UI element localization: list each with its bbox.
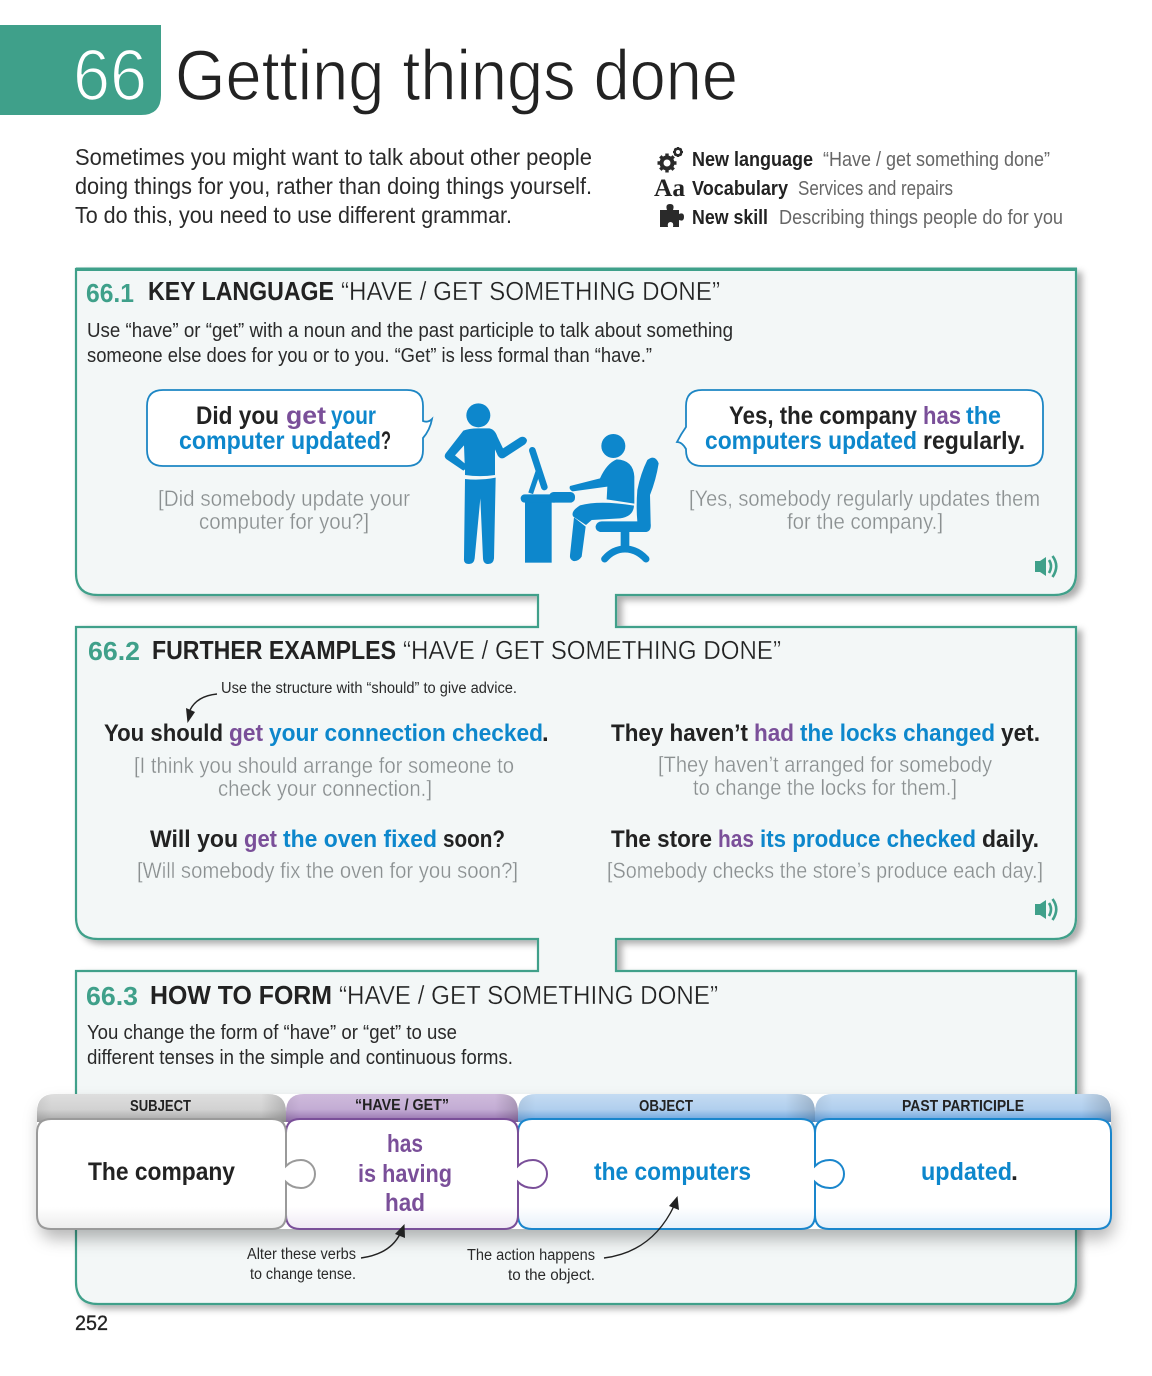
heading 66.3: [86, 980, 718, 1011]
example 1: [104, 720, 549, 801]
learning objectives: New skill: [692, 207, 768, 229]
puzzle piece: have / get: is having: [358, 1160, 452, 1188]
speech bubble: answer: the: [966, 402, 1001, 430]
paraphrase: answer: for the company.]: [787, 509, 943, 534]
explanation text: different tenses in the simple and continuous forms.: [87, 1047, 513, 1069]
example 3: get: [244, 826, 277, 853]
learning objectives: [654, 147, 1063, 229]
example 2: to change the locks for them.]: [693, 775, 957, 800]
speech bubble: question: ?: [381, 427, 391, 455]
heading 66.1: “HAVE / GET SOMETHING DONE”: [341, 276, 720, 306]
example 2: [They haven’t arranged for somebody: [658, 752, 992, 777]
heading 66.3: “HAVE / GET SOMETHING DONE”: [339, 980, 718, 1010]
explanation text: [87, 1022, 513, 1069]
example 2: had: [754, 720, 794, 747]
example 4: daily.: [982, 826, 1039, 853]
heading 66.3: 66.3: [86, 981, 138, 1011]
learning objectives: Vocabulary: [692, 178, 789, 200]
puzzle piece: have / get: had: [385, 1189, 425, 1217]
explanation text: [87, 320, 733, 367]
example 1: check your connection.]: [218, 776, 432, 801]
heading 66.2: 66.2: [88, 636, 140, 666]
puzzle piece: subject: SUBJECT: [130, 1098, 191, 1115]
speech bubble: answer: [677, 390, 1043, 466]
intro text: Sometimes you might want to talk about other people: [75, 144, 592, 170]
speech bubble: question: computer updated: [179, 427, 381, 455]
icon: audio speaker: [1035, 899, 1056, 920]
puzzle piece: object: the computers: [594, 1158, 751, 1186]
example 1: get: [229, 720, 263, 747]
chapter number tab: [0, 25, 161, 116]
learning objectives: “Have / get something done”: [823, 149, 1050, 171]
panel: 66.2 further examples: [88, 635, 1056, 920]
puzzle piece: subject: [37, 1094, 315, 1229]
title: Getting things done: [175, 37, 738, 116]
learning objectives: Services and repairs: [798, 178, 953, 200]
paraphrase: answer: [689, 486, 1040, 534]
intro text: [75, 144, 592, 228]
paraphrase: question: computer for you?]: [199, 509, 369, 534]
speech bubble: answer: Yes, the company: [729, 402, 917, 430]
annotation: action on object: The action happens: [467, 1247, 595, 1264]
annotation: action on object: [467, 1196, 679, 1284]
example 4: [607, 826, 1043, 883]
example 1: your connection checked: [269, 720, 543, 747]
intro text: To do this, you need to use different grammar.: [75, 202, 512, 228]
icon: puzzle piece: [660, 204, 684, 227]
puzzle piece: have / get: “HAVE / GET”: [355, 1097, 449, 1114]
heading 66.2: “HAVE / GET SOMETHING DONE”: [403, 635, 781, 665]
annotation: alter verbs: Alter these verbs: [247, 1246, 356, 1263]
annotation: action on object: to the object.: [508, 1267, 595, 1284]
explanation text: You change the form of “have” or “get” to use: [87, 1022, 457, 1044]
puzzle piece: past participle: .: [1011, 1158, 1018, 1186]
example 3: [Will somebody fix the oven for you soon?]: [137, 858, 518, 883]
example 4: its produce checked: [760, 826, 976, 853]
learning objectives: New language: [692, 149, 813, 171]
example 4: [Somebody checks the store’s produce each day.]: [607, 858, 1043, 883]
icon: Aa: Aa: [654, 175, 685, 202]
paraphrase: question: [Did somebody update your: [158, 486, 410, 511]
annotation: alter verbs: to change tense.: [250, 1266, 356, 1283]
chapter number tab: 66: [73, 36, 147, 116]
annotation: alter verbs: [247, 1224, 405, 1283]
speech bubble: question: get: [286, 402, 327, 430]
puzzle piece: have / get: has: [387, 1130, 423, 1158]
heading 66.3: HOW TO FORM: [150, 980, 332, 1010]
heading 66.1: KEY LANGUAGE: [148, 276, 334, 306]
speech bubble: question: Did you: [196, 402, 279, 430]
paraphrase: answer: [Yes, somebody regularly updates them: [689, 486, 1040, 511]
example 3: soon?: [443, 826, 505, 853]
heading 66.1: 66.1: [86, 278, 134, 308]
speech bubble: answer: regularly.: [923, 427, 1025, 455]
puzzle piece: past participle: PAST PARTICIPLE: [902, 1098, 1024, 1115]
speech bubble: question: your: [331, 402, 376, 430]
puzzle piece: subject: The company: [88, 1158, 235, 1186]
explanation text: Use “have” or “get” with a noun and the past participle to talk about something: [87, 320, 733, 342]
annotation: should: [186, 680, 517, 723]
example 4: has: [718, 826, 754, 853]
heading 66.1: [86, 276, 720, 308]
puzzle piece: past participle: updated: [921, 1158, 1012, 1186]
sentence formula puzzle: [37, 1094, 1111, 1229]
illustration: man instructing a seated computer user: [445, 403, 659, 564]
puzzle piece: have / get: [286, 1094, 547, 1229]
icon: audio speaker: [1035, 556, 1056, 577]
example 3: the oven fixed: [283, 826, 437, 853]
puzzle piece: past participle: [815, 1094, 1111, 1229]
page number: 252: [75, 1312, 108, 1335]
learning objectives: Describing things people do for you: [779, 207, 1063, 229]
example 1: You should: [104, 720, 223, 747]
example 2: [611, 720, 1040, 800]
panel: 66.1 key language: [86, 276, 1056, 577]
panel: 66.3 how to form: [37, 980, 1111, 1284]
example 1: .: [542, 720, 549, 747]
speech bubble: question: [147, 390, 432, 466]
speech bubble: answer: has: [923, 402, 961, 430]
example 2: They haven’t: [611, 720, 748, 747]
puzzle piece: object: OBJECT: [639, 1098, 693, 1115]
example 2: the locks changed: [800, 720, 995, 747]
icon: gears: [658, 147, 683, 172]
paraphrase: question: [158, 486, 410, 534]
example 3: [137, 826, 518, 883]
annotation: should: Use the structure with “should” to give advice.: [221, 680, 517, 697]
example 2: yet.: [1001, 720, 1040, 747]
intro text: doing things for you, rather than doing things yourself.: [75, 173, 592, 199]
puzzle piece: object: [518, 1094, 844, 1229]
panels background with connectors: [76, 268, 1077, 1304]
heading 66.2: FURTHER EXAMPLES: [152, 635, 396, 665]
speech bubble: answer: computers updated: [705, 427, 917, 455]
example 1: [I think you should arrange for someone to: [134, 753, 514, 778]
puzzle shadow: [37, 1094, 1111, 1229]
heading 66.2: [88, 635, 781, 666]
example 3: Will you: [150, 826, 238, 853]
explanation text: someone else does for you or to you. “Get” is less formal than “have.”: [87, 345, 652, 367]
example 4: The store: [611, 826, 712, 853]
